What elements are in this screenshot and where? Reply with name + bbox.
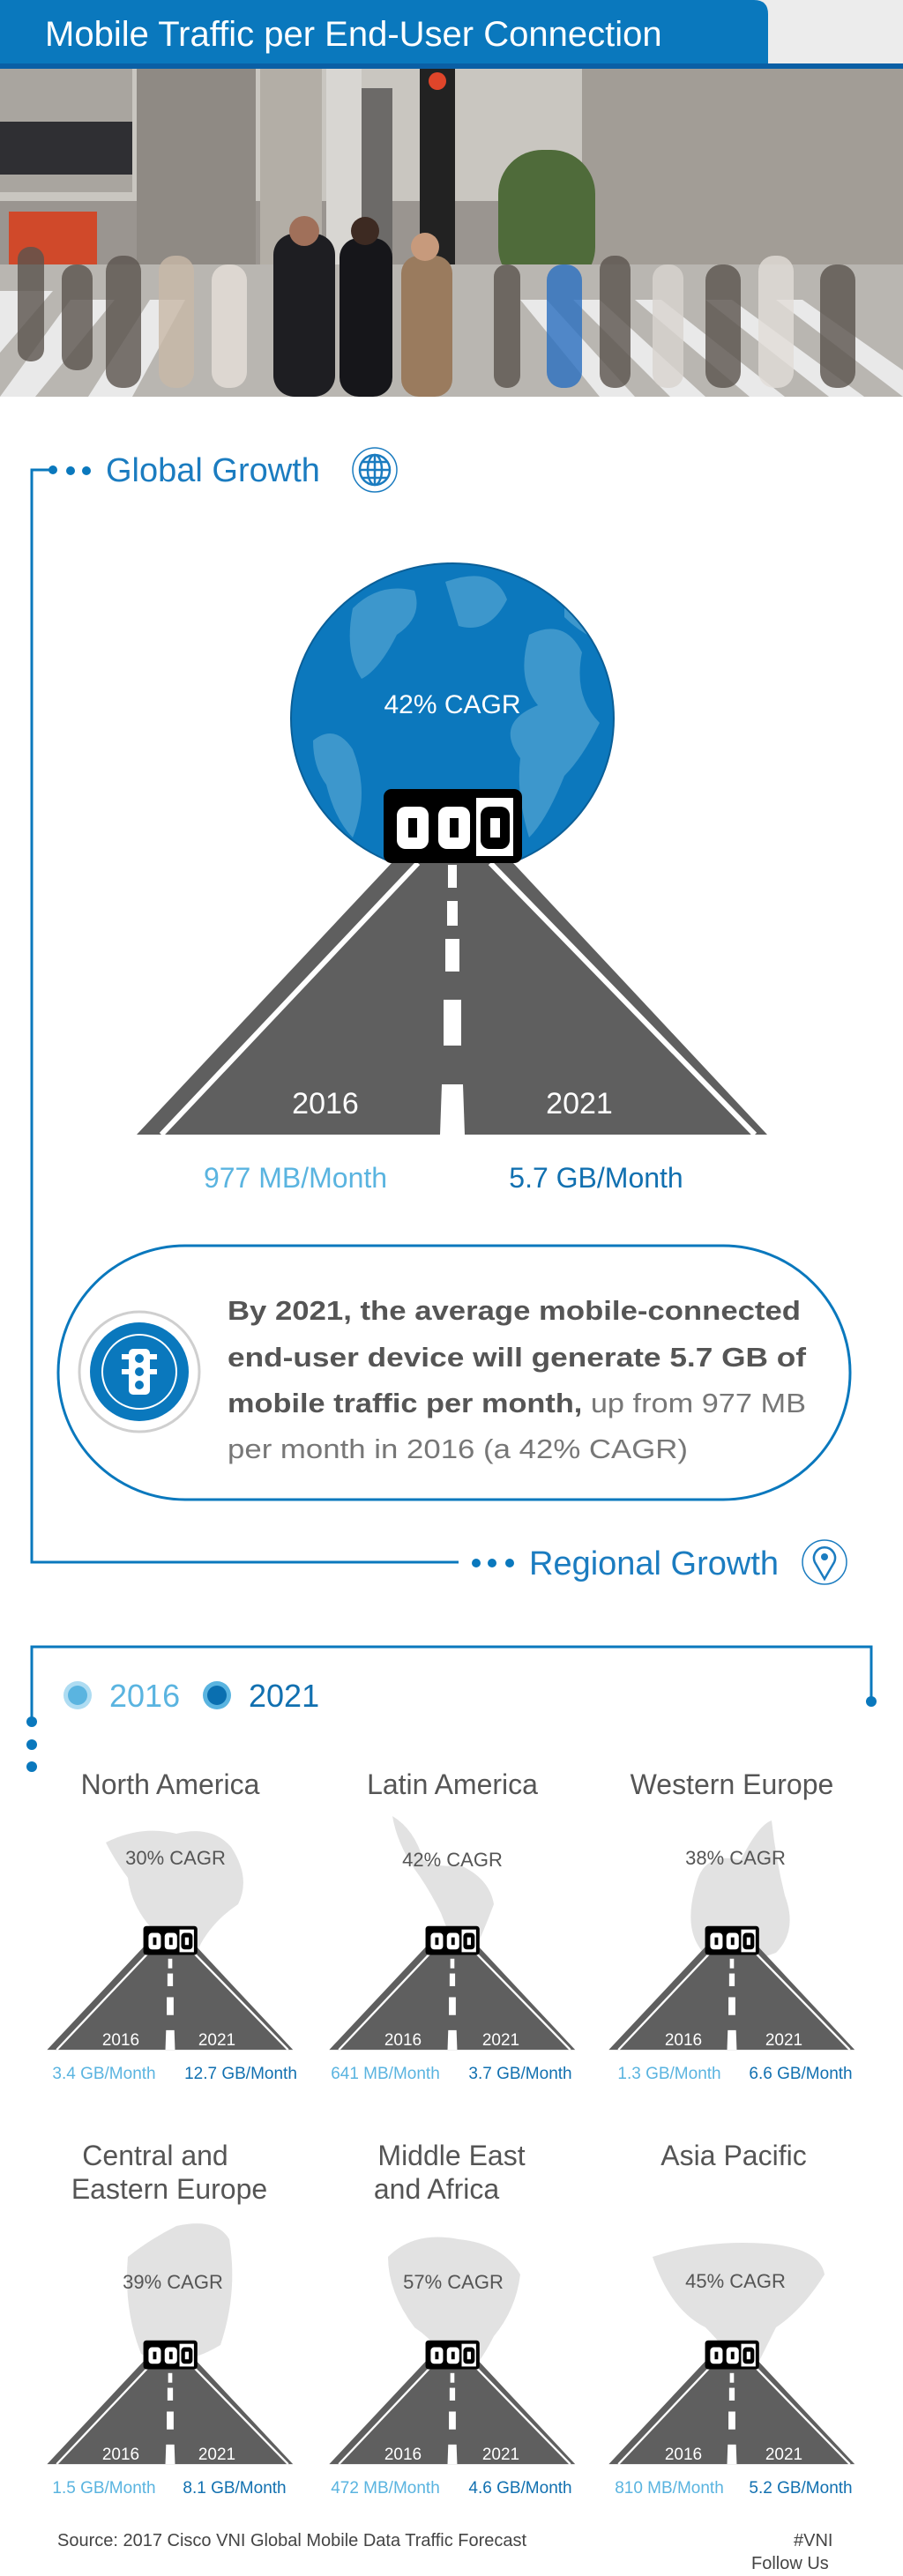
region: Central and Eastern Europe: 2016: [102, 2446, 139, 2464]
region: Western Europe: 2021: [765, 2031, 802, 2050]
legend: [63, 1678, 319, 1714]
region: Western Europe: [608, 1768, 854, 2083]
global values: 5.7 GB/Month: [509, 1162, 683, 1194]
road: global: 2016: [292, 1087, 359, 1120]
heading: Regional Growth: [472, 1540, 847, 1584]
source footer: Source: 2017 Cisco VNI Global Mobile Data Traffic Forecast: [57, 2531, 527, 2550]
region: Asia Pacific: 2016: [665, 2446, 702, 2464]
icon: globe: [353, 448, 397, 492]
region: Middle East and Africa: 4.6 GB/Month: [468, 2479, 572, 2498]
region: Western Europe: 2016: [665, 2031, 702, 2050]
region: Central and Eastern Europe: 39% CAGR: [123, 2271, 223, 2293]
region: Latin America: Latin America: [367, 1768, 538, 1800]
callout text: mobile traffic per month, up from 977 MB: [228, 1388, 806, 1418]
region: Latin America: 2021: [482, 2031, 519, 2050]
global values: [204, 1162, 683, 1194]
connector line: [32, 476, 459, 1562]
region: Asia Pacific: [608, 2140, 854, 2498]
region: Western Europe: 38% CAGR: [685, 1847, 786, 1869]
heading: Global Growth: [32, 448, 397, 492]
region: Latin America: [329, 1768, 575, 2083]
region: North America: 12.7 GB/Month: [184, 2065, 297, 2083]
road: global: [137, 863, 767, 1135]
legend: 2016: [109, 1678, 180, 1714]
region: Latin America: 2016: [384, 2031, 422, 2050]
region: Central and Eastern Europe: Central and: [82, 2140, 228, 2171]
source footer: #VNI: [794, 2531, 832, 2550]
global values: 977 MB/Month: [204, 1162, 387, 1194]
region: Central and Eastern Europe: [47, 2140, 293, 2498]
callout text: per month in 2016 (a 42% CAGR): [228, 1433, 688, 1464]
callout text: [228, 1295, 807, 1464]
region: North America: 2021: [198, 2031, 235, 2050]
region: Middle East and Africa: 472 MB/Month: [331, 2479, 440, 2498]
region: Middle East and Africa: 57% CAGR: [403, 2271, 504, 2293]
road: global: 2021: [546, 1087, 613, 1120]
regional connector: [26, 1647, 877, 1772]
title banner: [0, 0, 903, 69]
region: North America: 30% CAGR: [125, 1847, 226, 1869]
region: Central and Eastern Europe: 2021: [198, 2446, 235, 2464]
region: Middle East and Africa: and Africa: [374, 2173, 499, 2205]
region: Central and Eastern Europe: 1.5 GB/Month: [52, 2479, 156, 2498]
region: Asia Pacific: 5.2 GB/Month: [749, 2479, 853, 2498]
globe: 42% CAGR: [384, 690, 521, 719]
region: Asia Pacific: Asia Pacific: [660, 2140, 807, 2171]
heading: Global Growth: Global Growth: [106, 452, 320, 489]
region: Western Europe: Western Europe: [631, 1768, 833, 1800]
region: Latin America: 42% CAGR: [402, 1849, 503, 1871]
region: Central and Eastern Europe: Eastern Europe: [71, 2173, 267, 2205]
callout text: end-user device will generate 5.7 GB of: [228, 1342, 807, 1373]
counter: global: [384, 789, 522, 863]
callout text: By 2021, the average mobile-connected: [228, 1295, 801, 1326]
region: Asia Pacific: 810 MB/Month: [615, 2479, 724, 2498]
region: Western Europe: 1.3 GB/Month: [617, 2065, 721, 2083]
photo: busy crosswalk: [0, 69, 903, 397]
source footer: Follow Us: [751, 2554, 829, 2573]
heading: Regional Growth: Regional Growth: [529, 1545, 779, 1582]
callout: [58, 1246, 850, 1500]
region: North America: 2016: [102, 2031, 139, 2050]
region: Middle East and Africa: Middle East: [377, 2140, 526, 2171]
region: Latin America: 3.7 GB/Month: [468, 2065, 572, 2083]
icon: location pin: [802, 1540, 847, 1584]
region: Middle East and Africa: 2021: [482, 2446, 519, 2464]
region: Middle East and Africa: 2016: [384, 2446, 422, 2464]
region: Western Europe: 6.6 GB/Month: [749, 2065, 853, 2083]
region: North America: North America: [81, 1768, 260, 1800]
region: Middle East and Africa: [329, 2140, 575, 2498]
region: Latin America: 641 MB/Month: [331, 2065, 440, 2083]
source footer: [57, 2531, 832, 2573]
icon: traffic light: [79, 1312, 199, 1432]
region: Central and Eastern Europe: 8.1 GB/Month: [183, 2479, 287, 2498]
region: North America: 3.4 GB/Month: [52, 2065, 156, 2083]
title banner: Mobile Traffic per End-User Connection: [45, 15, 662, 54]
region: Asia Pacific: 2021: [765, 2446, 802, 2464]
globe: [291, 563, 614, 874]
region: North America: [47, 1768, 297, 2083]
legend: 2021: [249, 1678, 319, 1714]
region: Asia Pacific: 45% CAGR: [685, 2270, 786, 2292]
